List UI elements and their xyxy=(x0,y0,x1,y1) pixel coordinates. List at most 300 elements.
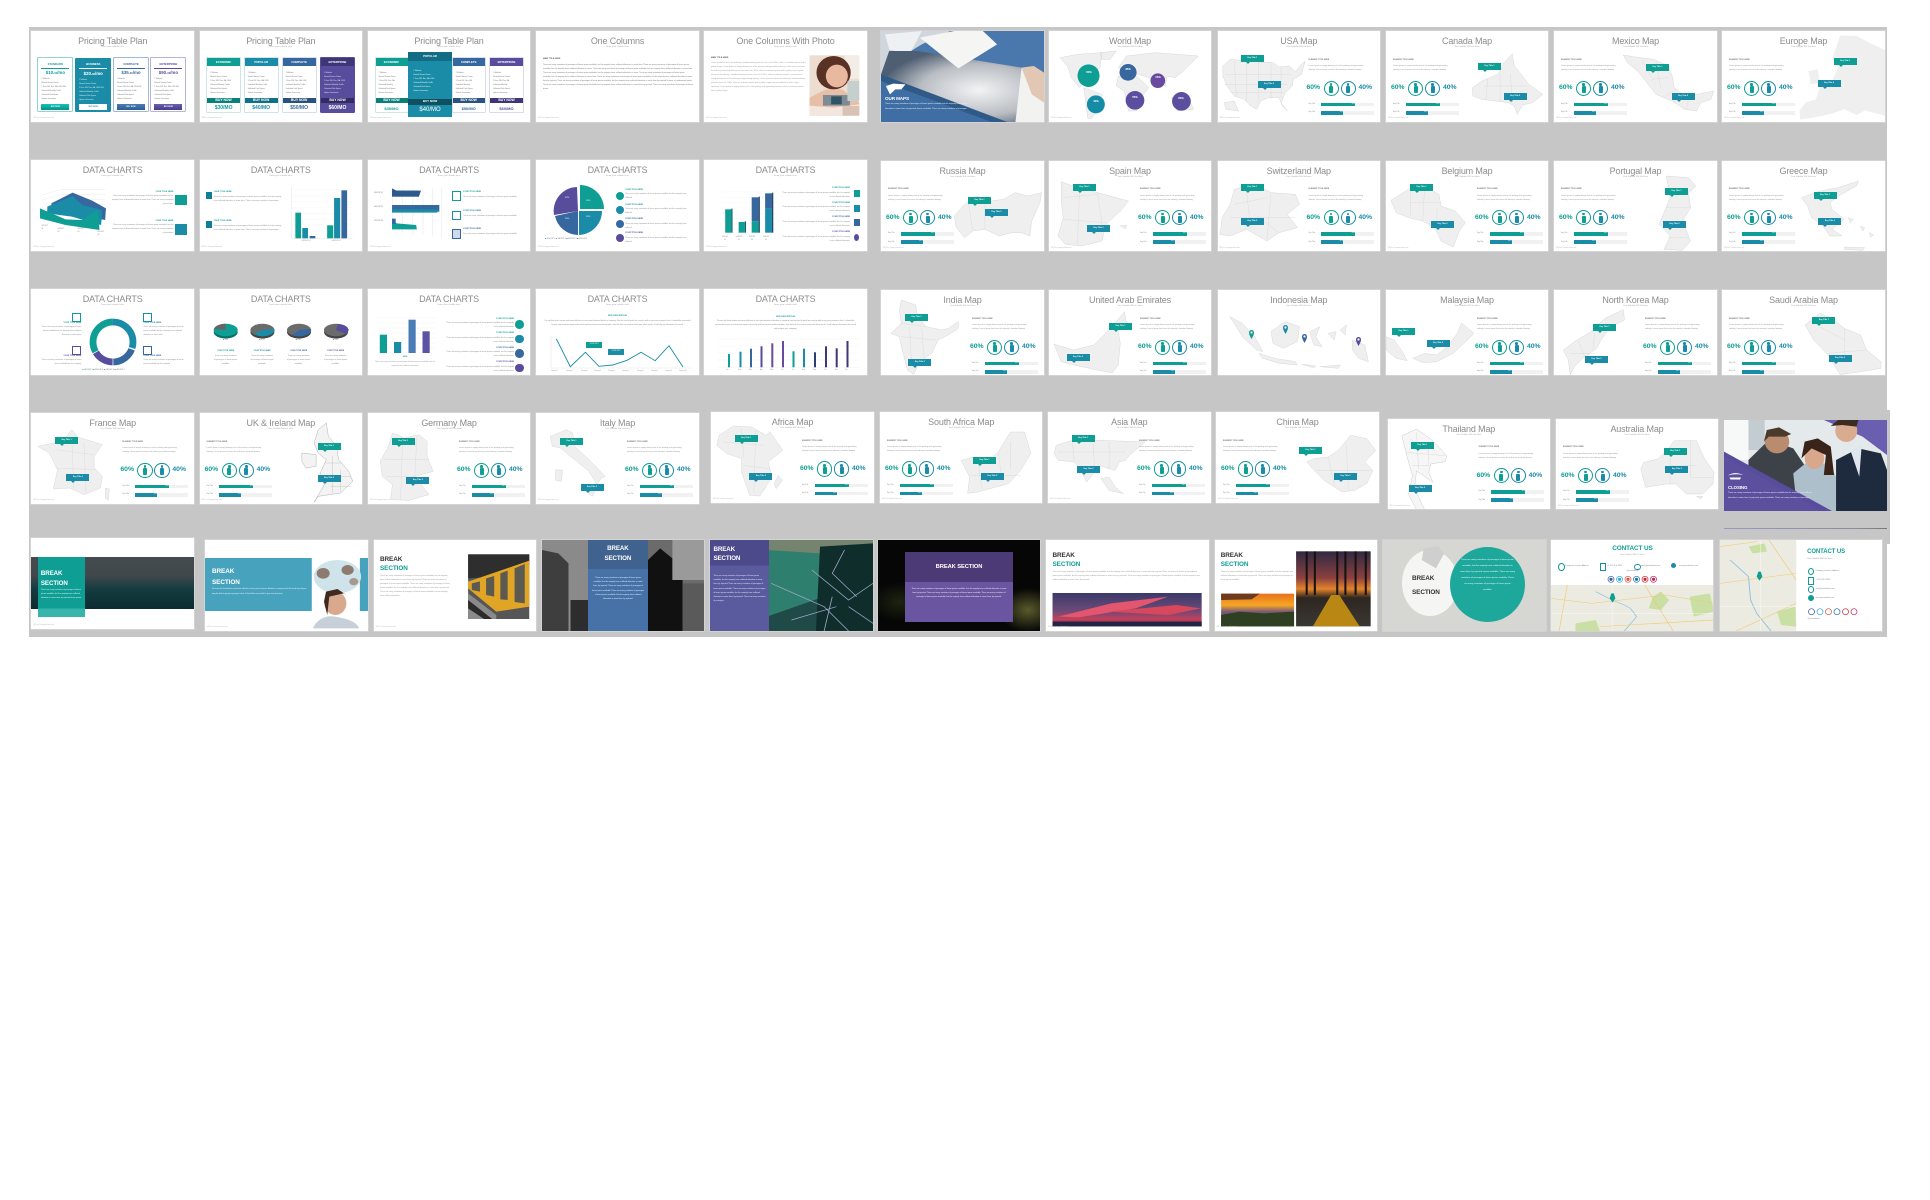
column: economic xyxy=(206,57,241,113)
stat panel: 40% xyxy=(1611,84,1625,91)
map xyxy=(1722,161,1885,252)
subtitle: Your Subtitle Will Go Here xyxy=(1286,176,1311,178)
column: popular: BUY NOW xyxy=(253,98,269,102)
column: enterprise: Uptime Guarantee xyxy=(324,92,339,94)
text block heading: MAIN TITLE HERE xyxy=(711,57,728,59)
slide: break section 5 xyxy=(710,540,873,631)
callout xyxy=(1663,221,1686,228)
stat panel: 60% xyxy=(1772,363,1776,364)
icon 3 xyxy=(515,349,524,358)
map xyxy=(1722,290,1885,381)
stat panel: 60% xyxy=(1475,214,1489,221)
callout xyxy=(580,484,604,491)
callout: Key Title 1 xyxy=(1417,444,1427,446)
slide: China map xyxy=(1216,412,1379,503)
subtitle: Your Subtitle Will Go Here xyxy=(950,305,975,307)
slide: UK and Ireland map xyxy=(200,413,362,504)
map xyxy=(31,413,194,504)
card: standard: Unlimited Disk Space xyxy=(41,94,58,96)
dark photo band xyxy=(31,557,194,609)
faint cyclist silhouette xyxy=(1383,540,1546,631)
callout xyxy=(1241,184,1264,191)
title: DATA CHARTS xyxy=(756,165,815,175)
subtitle: Enter your subtitle here xyxy=(101,304,124,306)
slide: Spain map xyxy=(1049,161,1211,251)
stat panel: 40% xyxy=(1171,371,1174,372)
footer: SBI Your Company Name here xyxy=(202,118,222,119)
column: popular: Normal Server Power xyxy=(248,76,265,78)
axis labels: Category 5 xyxy=(608,371,615,372)
month labels: Jun xyxy=(781,369,784,371)
stat panel xyxy=(1475,316,1549,376)
callout xyxy=(1478,63,1501,70)
text item 2: YOUR TITLE HERE xyxy=(463,210,481,212)
slide: data chart area: There are many variations of passages of lorem ipsum available, but the majority have suffered alteration in some form. There are many variations of passages. xyxy=(112,224,173,234)
column: economic: Normal Server Power xyxy=(378,76,396,78)
chart callout xyxy=(586,342,602,348)
stat panel: Key Title xyxy=(1393,103,1399,105)
stat panel: 60% xyxy=(120,466,134,473)
stat panel: Lorem Ipsum is simply dummy text of the printing and typesetting industry. Lorem Ipsum has been the industry's standard dummy xyxy=(1308,65,1363,71)
stat panel: ELEMENT TITLE HERE xyxy=(1563,446,1584,448)
slide: data chart donut: There are many variations of passages of lorem ipsum available but the majority have suffered alteration in some form. xyxy=(143,326,183,336)
stat panel: Lorem Ipsum is simply dummy text of the printing and typesetting industry. Lorem Ipsum has been the industry's standard dummy xyxy=(1645,324,1699,330)
3D column chart xyxy=(725,192,774,233)
slide: data chart 3D columns: There are many variations of passages of lorem ipsum available, but the majority have suffered alteration. xyxy=(782,221,850,227)
column: enterprise: Unlimited Monthly xyxy=(493,84,507,86)
column: enterprise: ENTERPRISE xyxy=(329,60,346,64)
footer: SBI Your Company Name here xyxy=(1388,248,1409,249)
heading: BREAK xyxy=(380,556,402,563)
stat panel: Key Title xyxy=(887,484,893,486)
stat panel: 40% xyxy=(1340,241,1343,242)
stat panel: Lorem Ipsum is simply dummy text of the printing and typesetting industry. Lorem Ipsum has been the industry's standard dummy xyxy=(122,447,177,453)
heading xyxy=(41,569,68,589)
stat panel: 60% xyxy=(457,466,471,473)
bubble labels: 15% xyxy=(1155,75,1161,79)
column: economic: 1 Free SSL Res, BA, DNS xyxy=(210,80,231,82)
text item 1 xyxy=(214,190,282,202)
stat panel: 40% xyxy=(1508,371,1512,372)
stat panel xyxy=(457,439,531,499)
icon 4 xyxy=(515,364,524,372)
callout xyxy=(1241,218,1264,225)
callout xyxy=(908,359,931,366)
text block: There are many variations of passages of lorem ipsum available but the majority have suffered alteration in some form, by injected. Ipsum available. There are many variations of passages. xyxy=(885,103,969,110)
axis labels: Category 1 xyxy=(551,371,558,372)
column: economic: 1 Free SSL Res, BA xyxy=(378,80,395,82)
column: enterprise: 1 Website xyxy=(324,72,332,74)
subtitle: Enter your subtitle here xyxy=(774,46,797,48)
text block: There are many variations of passages of lorem ipsum available, but the majority have suffered alteration in some form. There are many variations of passages of lorem ipsum available, but the majority have suffered alteration in some. There are many variations of passages of lorem ipsum available, but the majority have suffered alteration in some form. There are many variations of passages of lorem ipsum available, but the majority have suffered alteration in some. There are many variations of passages of lorem ipsum available, but the majority have suffered alteration in some form. There are many variations of passages of lorem ipsum available, but the majority have suffered alteration in some form by injected. There are many variations of passages of lorem ipsum available, but the majority have suffered alteration in some form by injected humour, or randomised words. There are many variations of passages of lorem ipsum available, but the majority have suffered alteration in some form by injected. There are many variations of passages of lorem ipsum. xyxy=(543,64,693,90)
text block: There are many variations of passages of lorem ipsum available, but the majority have suffered alteration in some form, by injected. There are many variations of passages of lorem ipsum available. There are many variations of passages of lorem ipsum available, but the majority have suffered alteration in some form, by injected. There are many variations of passages. xyxy=(714,575,766,602)
column: enterprise: Unlimited Disk Space xyxy=(493,88,510,90)
text item 1 xyxy=(442,317,514,319)
column: popular highlighted: 1 Website xyxy=(413,70,421,72)
title: Saudi Arabia Map xyxy=(1769,295,1838,305)
icon top left xyxy=(72,313,81,322)
stat panel: Lorem Ipsum is simply dummy text of the printing and typesetting industry. Lorem Ipsum has been the industry's standard dummy xyxy=(1477,324,1531,330)
map pin 1 xyxy=(1249,330,1254,339)
column: complete: Unlimited Disk Space xyxy=(286,88,303,90)
description text: It is not that much secure and more effective to start your business blocks in company. But the hard of profit you may be able to get your prospect clear. It should be successful to your new business report only not be sold on massive marketing plan. Just the best succeed to make your ideas works. It will help you determine the result. xyxy=(544,320,691,326)
slide: data chart columns: There are many variations of passages of lorem ipsum available, but the majority have suffered alteration. xyxy=(446,366,514,372)
stat panel: 60% xyxy=(885,465,899,472)
column: popular: 1 Website xyxy=(248,72,256,74)
stat panel: 40% xyxy=(1510,499,1513,500)
teal ellipse xyxy=(1450,547,1525,622)
stat panel: Key Title xyxy=(1561,232,1567,234)
text top right xyxy=(143,321,188,323)
title: USA Map xyxy=(1280,36,1317,46)
text item 4: YOUR TITLE HERE xyxy=(832,231,850,233)
title: Africa Map xyxy=(772,417,813,427)
column: complete: $50/MO xyxy=(290,105,308,111)
map pin 4 xyxy=(1356,337,1360,346)
slide: Africa map xyxy=(711,412,874,503)
slide: South Africa map xyxy=(880,412,1042,503)
stat panel: Key Title xyxy=(1477,241,1483,243)
bubble labels: 35% xyxy=(1125,67,1131,71)
subtitle: Your Subtitle Will Go Here xyxy=(1456,434,1481,436)
column: popular: Uptime Guarantee xyxy=(248,92,262,94)
card: business: Uptime Guarantee xyxy=(79,99,94,101)
callout: Key Title 2 xyxy=(987,475,997,477)
footer: SBI Your Company Name here xyxy=(1220,118,1240,119)
column: economic: Unlimited Monthly Traffic xyxy=(210,84,230,86)
stat panel: Key Title xyxy=(1308,232,1315,234)
card: enterprise: $50.00/mo xyxy=(159,70,178,75)
callout: Key Title 2 xyxy=(1670,223,1679,225)
subtitle: Your Subtitle Will Go Here xyxy=(1791,176,1816,178)
subtitle: Your Subtitle Will Go Here xyxy=(950,176,975,178)
title: Europe Map xyxy=(1780,36,1827,46)
footer: SBI Your Company Name here xyxy=(1048,627,1069,628)
column: popular highlighted: Unlimited Monthly Traffic xyxy=(413,82,433,84)
callout: Key Title 2 xyxy=(1073,356,1083,358)
column: economic: $30/MO xyxy=(215,105,232,111)
callout: Key Title 1 xyxy=(1417,186,1426,188)
stat panel: 60% xyxy=(1352,233,1355,234)
callout: Key Title 1 xyxy=(912,316,921,318)
callout xyxy=(1431,221,1454,228)
contact row: info@yourwebsite.com xyxy=(1641,565,1660,567)
stat panel: 40% xyxy=(1760,112,1764,113)
stat panel: Lorem Ipsum is simply dummy text of the printing and typesetting industry. Lorem Ipsum has been the industry's standard dummy xyxy=(1140,195,1194,201)
four 3D pie charts xyxy=(200,289,363,380)
axis labels xyxy=(302,240,341,242)
callout: Key Title 1 xyxy=(980,459,989,461)
text item 4: YOUR TITLE HERE xyxy=(625,232,643,234)
text bottom left xyxy=(36,354,81,356)
card: standard: Unlimited Monthly Traffic xyxy=(41,90,61,92)
stat panel: 60% xyxy=(1727,214,1741,221)
slide: data chart pie: There are many variations of lorem ipsum available, but the majority have suffered. xyxy=(625,208,686,214)
slide: one column text xyxy=(536,31,699,122)
card: business: 1 Website xyxy=(79,79,87,81)
column: economic: $30/MO xyxy=(384,106,399,111)
callout xyxy=(1241,55,1264,62)
stat panel: Key Title xyxy=(972,362,978,364)
stat panel: Key Title xyxy=(1477,362,1483,364)
column: complete xyxy=(452,57,486,113)
column: economic: BUY NOW xyxy=(383,98,400,102)
text bottom right: YOUR TITLE HERE xyxy=(143,355,161,357)
subtitle: Your Subtitle Will Go Here xyxy=(1117,46,1143,48)
title: Russia Map xyxy=(939,166,986,176)
title: Pricing Table Plan xyxy=(414,36,484,46)
column: popular xyxy=(244,57,279,113)
map xyxy=(368,413,531,504)
footer: SBI Your Company Name here xyxy=(1390,506,1410,507)
text bottom right xyxy=(143,354,188,356)
logo mark xyxy=(1728,473,1743,480)
axis labels: 03 xyxy=(751,239,753,241)
title: Switzerland Map xyxy=(1267,166,1331,176)
subtitle: Your Subtitle Will Go Here xyxy=(1454,176,1480,178)
callout: Key Title 2 xyxy=(1510,95,1520,97)
stat panel: 60% xyxy=(931,233,934,234)
column: popular highlighted: $40/MO xyxy=(419,107,441,113)
chart caption: 2014 xyxy=(403,356,407,358)
heading: BREAK xyxy=(212,568,234,575)
month labels: May xyxy=(770,369,773,371)
callout: Key Title 2 xyxy=(1672,468,1682,470)
heading xyxy=(380,555,408,574)
stat panel: ELEMENT TITLE HERE xyxy=(1477,188,1498,190)
callout xyxy=(1077,466,1100,473)
stat panel: ELEMENT TITLE HERE xyxy=(1477,318,1498,320)
callout: Key Title 1 xyxy=(975,199,984,201)
card: enterprise: Unlimited Monthly Traffic xyxy=(154,90,174,92)
card: enterprise: Normal Server Power xyxy=(154,82,172,84)
stat panel xyxy=(1727,187,1801,247)
stat panel: 40% xyxy=(490,494,494,495)
stat panel: Key Title xyxy=(1308,103,1315,105)
text item 1: YOUR TITLE HERE xyxy=(463,191,481,193)
slide: closing photo xyxy=(1724,420,1887,511)
stat panel: 60% xyxy=(1727,343,1741,350)
subtitle: Enter your subtitle here xyxy=(606,46,629,48)
map xyxy=(1216,412,1379,503)
heading: OUR MAPS xyxy=(885,96,909,101)
stat panel xyxy=(1391,58,1459,115)
email row: info@yourwebsite.com xyxy=(1816,588,1835,590)
axis labels: GROUP 02 xyxy=(332,240,341,242)
text block: There are many variations of passages of lorem ipsum available, but the majority have suffered alteration in some form, by injected lorem ipsum. xyxy=(41,589,82,599)
subtitle: Enter your subtitle here xyxy=(101,175,124,177)
map xyxy=(954,192,1042,238)
footer: SBI Your Company Name here xyxy=(370,118,391,119)
callout: Key Title 1 xyxy=(1247,57,1257,59)
stat panel: 40% xyxy=(937,465,951,472)
map xyxy=(1049,161,1212,252)
subtitle: Enter your subtitle here xyxy=(438,46,460,48)
heading xyxy=(588,544,648,563)
stat panel: Lorem Ipsum is simply dummy text of the printing and typesetting industry. Lorem Ipsum has been the industry's standard dummy xyxy=(1140,324,1194,330)
stat panel: 60% xyxy=(1221,465,1235,472)
footer: SBI Your Company Name here xyxy=(882,499,903,500)
stat panel: 40% xyxy=(1527,214,1541,221)
slide: data chart columns: There are many variations of passages of lorem ipsum available, but the majority have suffered alteration. xyxy=(446,322,514,328)
column: enterprise xyxy=(320,57,355,113)
pie chart xyxy=(554,185,604,235)
subtitle: Enter your subtitle here xyxy=(606,175,629,177)
slide: data chart area: There are many variations of passages of lorem ipsum available, but the majority have suffered alteration in some form. There are many variations of passages. xyxy=(112,195,173,205)
stat panel: 60% xyxy=(1522,491,1525,492)
stat panel: Lorem Ipsum is simply dummy text of the printing and typesetting industry. Lorem Ipsum has been the industry's standard dummy xyxy=(1729,195,1783,201)
slide: break section 7 xyxy=(1046,540,1209,631)
slide: contact us with side map xyxy=(1720,540,1882,631)
pie 2 caption: ■ 2015 xyxy=(259,339,265,341)
stat panel: Lorem Ipsum is simply dummy text of the printing and typesetting industry. Lorem Ipsum has been the industry's standard dummy xyxy=(1393,65,1447,71)
stat panel: Key Title xyxy=(1563,490,1569,492)
stat panel: Key Title xyxy=(1729,103,1735,105)
month labels: Jan xyxy=(726,369,729,371)
card: standard: BUY NOW xyxy=(51,106,60,108)
callout: Key Title 1 xyxy=(1672,190,1681,192)
slide: break section 8 xyxy=(1215,540,1377,631)
icon 3 xyxy=(854,219,860,226)
card: business: $20.00/mo xyxy=(84,71,103,76)
text item 2 xyxy=(442,331,514,333)
stat panel: 40% xyxy=(1170,493,1174,494)
phone row: +1 123 45 6 7890 xyxy=(1816,579,1830,581)
pie labels: 20% xyxy=(565,218,569,220)
icon circle 4 xyxy=(616,234,624,242)
title: Belgium Map xyxy=(1442,166,1492,176)
slide: North Korea map xyxy=(1554,290,1717,375)
callout xyxy=(905,314,928,321)
heading xyxy=(1221,551,1248,570)
month labels: Apr xyxy=(760,369,763,371)
stat panel: Key Title xyxy=(1140,370,1146,372)
subtitle: Your Subtitle Will Go Here xyxy=(1286,46,1311,48)
footer: SBI Your Company Name here xyxy=(1388,118,1409,119)
stat panel: Lorem Ipsum is simply dummy text of the printing and typesetting industry. Lorem Ipsum has been the industry's standard dummy xyxy=(627,447,681,453)
text block: There are many variations of passages of lorem ipsum available, but the majority have suffered alteration in some form, by injected. There are many variations of passages of lorem ipsum available. There are many variations of passages of lorem ipsum available, but the majority have suffered alteration in some form, by injected. There are many variations of passages of lorem ipsum available, but the majority have suffered alteration. xyxy=(380,575,450,597)
text block: Lorem Ipsum has been the industry's standard dummy text ever since the 1500s, when an unknown printer took a galley of type. Lorem Ipsum is simply dummy text of the printing and typesetting industry. Lorem Ipsum has been the industry's standard dummy text ever since the 1500s, when an unknown printer took a galley. Lorem Ipsum has been the industry's standard dummy text ever since the 1500s, when an unknown printer. Lorem Ipsum is simply dummy text of the printing and typesetting industry. Lorem Ipsum has been the industry's standard dummy text ever since the 1500s, when an unknown printer took a galley of type and scrambled it to make a type specimen. Lorem Ipsum is simply dummy text of the printing and typesetting industry, when an unknown printer took a galley of type. xyxy=(711,62,806,92)
stat panel: Key Title xyxy=(1140,241,1146,243)
column: popular highlighted: Uptime Guarantee xyxy=(413,90,428,92)
stat panel xyxy=(1306,58,1374,115)
callout xyxy=(66,474,89,481)
stat panel: Key Title xyxy=(1561,111,1567,113)
callout: Key Title 2 xyxy=(1415,487,1425,489)
stat panel: Key Title xyxy=(1393,111,1399,113)
slide: Europe map xyxy=(1722,31,1885,122)
column: complete: 1 Website xyxy=(456,72,464,74)
stat panel: ELEMENT TITLE HERE xyxy=(1561,59,1582,61)
blue band xyxy=(205,558,368,611)
phone row xyxy=(1808,576,1878,585)
icon bottom left xyxy=(72,346,81,355)
column: economic: Unlimited Disk Space xyxy=(378,88,396,90)
text item 1: YOUR TITLE HERE xyxy=(214,191,232,193)
map xyxy=(1800,36,1885,120)
title: DATA CHARTS xyxy=(588,294,647,304)
stat panel: 40% xyxy=(1022,343,1036,350)
stat panel xyxy=(1559,187,1633,247)
callout xyxy=(1665,466,1688,473)
stat panel: 60% xyxy=(1559,84,1573,91)
callout xyxy=(1066,354,1090,361)
axis labels: GROUP xyxy=(722,236,728,238)
card: business: Unlimited Disk Space xyxy=(79,95,96,97)
subtitle: Your Subtitle Will Go Here xyxy=(1117,427,1142,429)
footer: SBI Your Company Name here xyxy=(1050,499,1071,500)
text block: There are many variations of passages of lorem ipsum available, but the majority have suffered alteration in some form, by injected. ipsum available. There are many variations of passages of lorem ipsum available. There are many variations of passages of lorem ipsum available. xyxy=(1460,559,1515,591)
slide: United Arab Emirates map xyxy=(1049,290,1211,375)
stat panel: 60% xyxy=(1561,472,1575,479)
stat panel: Lorem Ipsum is simply dummy text of the printing and typesetting industry. Lorem Ipsum has been the industry's standard dummy xyxy=(1139,446,1193,452)
slide: data chart pie: There are many variations of lorem ipsum available, but the majority have suffered. xyxy=(625,193,686,199)
footer: SBI Your Company Name here xyxy=(33,118,54,119)
slide: Asia map xyxy=(1048,412,1211,503)
footer: SBI Your Company Name here xyxy=(207,627,228,628)
stat panel: Key Title xyxy=(1477,232,1483,234)
card: complete: Uptime Guarantee xyxy=(117,98,132,100)
text item 3 xyxy=(442,346,514,348)
title: India Map xyxy=(943,295,982,305)
stat panel xyxy=(886,188,954,244)
card: enterprise: Unlimited Disk Space xyxy=(154,94,171,96)
stat panel: Key Title xyxy=(1223,492,1229,494)
slide: data chart 3D columns xyxy=(704,160,867,251)
text item 3: YOUR TITLE HERE xyxy=(625,218,643,220)
slide: break section 6 xyxy=(878,540,1040,631)
text item 2: YOUR TITLE HERE xyxy=(496,332,514,334)
column: popular highlighted: 1 Free SSL Res, BA, DNS xyxy=(413,78,434,80)
chart callout: YOUR TEXT xyxy=(611,351,621,352)
card: complete: 1 Free SSL Res, BA, DNS SSL xyxy=(117,86,142,88)
grey background notch on the right xyxy=(1887,410,1890,544)
callout: Key Title 2 xyxy=(324,477,334,479)
subtitle: Enter your subtitle here xyxy=(438,304,460,306)
callout: Key Title 1 xyxy=(1080,186,1089,188)
stat panel: 40% xyxy=(1190,343,1204,350)
card: complete: Unlimited Disk Space xyxy=(117,94,134,96)
month labels: Mar xyxy=(749,369,752,371)
pie 3 caption xyxy=(282,339,316,373)
contact row: Company Location, Address xyxy=(1565,565,1589,567)
subtitle: Your Subtitle Will Go Here xyxy=(1623,176,1648,178)
stat panel: ELEMENT TITLE HERE xyxy=(1729,318,1750,320)
callout: Key Title 2 xyxy=(1433,342,1443,344)
text item 4 xyxy=(782,230,850,242)
heading: CONTACT US xyxy=(1807,549,1845,555)
stat panel: 60% xyxy=(1138,343,1152,350)
slide: data chart 3D columns: There are many variations of passages of lorem ipsum available, but the majority have suffered alteration. xyxy=(782,206,850,212)
stat panel xyxy=(1643,316,1717,376)
axis labels: 02 xyxy=(738,239,740,241)
title: Italy Map xyxy=(600,418,635,428)
slide: Indonesia map xyxy=(1218,290,1380,375)
stat panel: 40% xyxy=(1273,465,1287,472)
callout xyxy=(392,438,415,445)
callout xyxy=(1818,80,1841,87)
text block: There are many variations of passages of lorem ipsum available but the majority have suffered, alteration in some form, by injected, ipsum available. There are many variations of passages. xyxy=(1728,492,1812,499)
subtitle: Your Subtitle Will Go Here xyxy=(1791,305,1816,307)
stat panel: 40% xyxy=(1760,371,1764,372)
pie 3 caption: There are many variations of passages of lorem ipsum available. xyxy=(287,355,310,365)
slide: data chart line xyxy=(536,289,699,375)
heading: SECTION xyxy=(1052,561,1080,568)
photo: lake and bare trees xyxy=(710,540,873,631)
slide: data chart monthly bars xyxy=(704,289,867,375)
callout: Key Title 1 xyxy=(1653,66,1662,68)
callout: Key Title 1 xyxy=(1306,449,1315,451)
